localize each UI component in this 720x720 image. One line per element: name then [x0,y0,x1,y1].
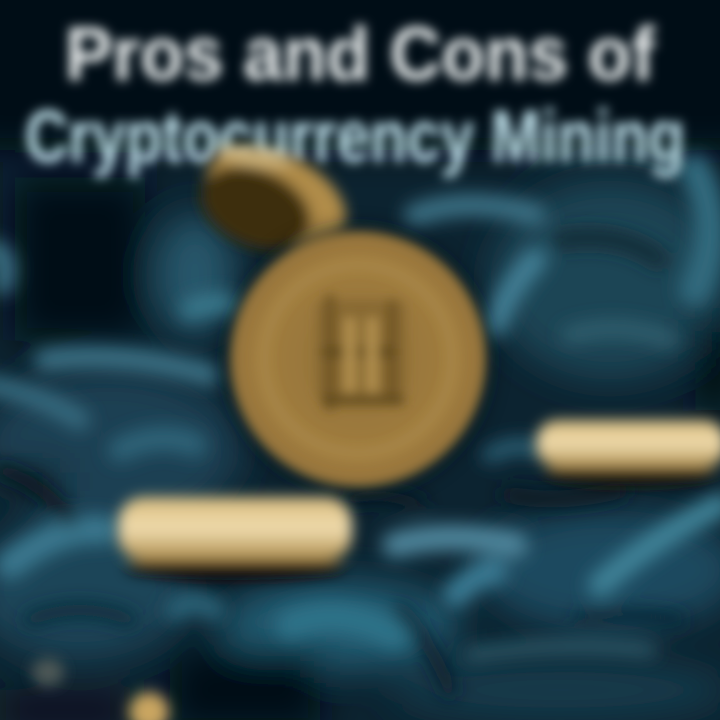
title [25,12,685,178]
icon: small pale mark bottom left [32,658,64,686]
icon: gold bar right [536,420,720,486]
icon: gold bar left [118,497,352,580]
icon: bitcoin coin [223,225,493,495]
icon: tilted back coin [188,128,361,268]
title: Pros and Cons of [65,12,656,97]
icon: small coin bottom [129,692,169,720]
